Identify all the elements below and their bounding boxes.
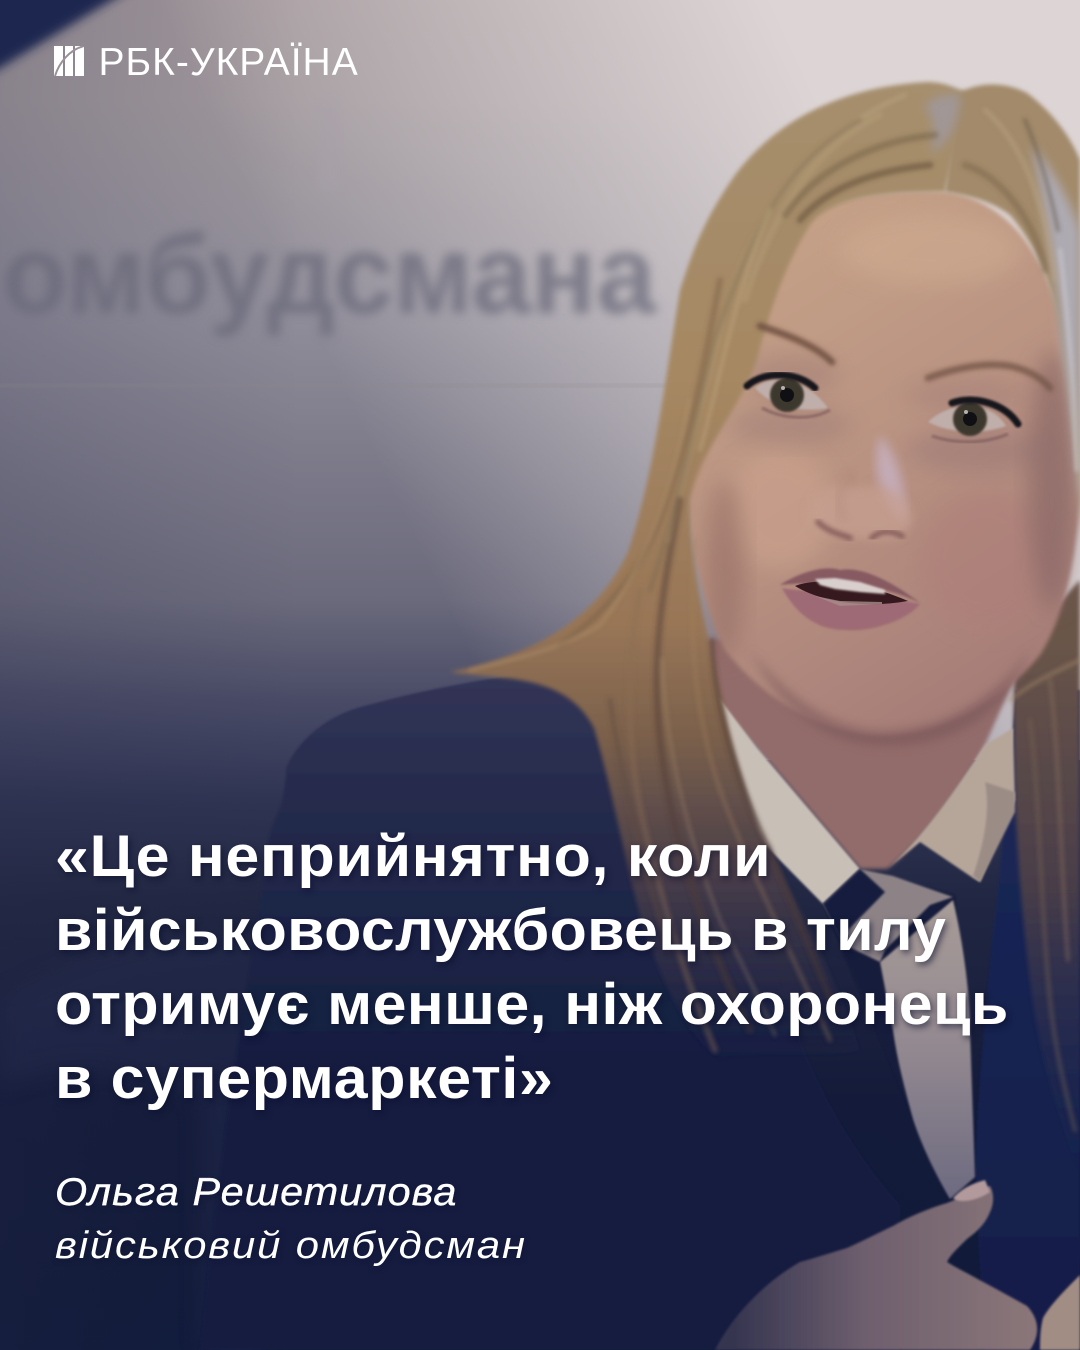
dark lapel behind collar: [823, 869, 975, 1199]
face: [687, 192, 1080, 735]
person: woman in navy jacket: [200, 82, 1080, 1350]
logo: РБК-Україна: [54, 41, 359, 84]
hair silver highlight right: [1032, 145, 1080, 520]
quote line 4: в супермаркеті»: [55, 1046, 554, 1111]
mouth: [780, 568, 920, 630]
collar band: [823, 869, 953, 962]
hair silver parting: [925, 94, 960, 155]
hair front left: [450, 82, 965, 1060]
eye left: [747, 375, 830, 417]
eye right: [928, 400, 1018, 442]
quote line 1: «Це неприйнятно, коли: [55, 824, 771, 889]
nose: [808, 435, 912, 540]
hair strands: [470, 95, 1080, 1130]
logo wordmark: РБК-УКРАЇНА: [98, 41, 359, 84]
jacket left shoulder and body: [200, 672, 900, 1350]
shirt placket: [880, 900, 975, 1199]
attribution: [55, 1171, 527, 1267]
hair right behind collar: [1014, 580, 1080, 1180]
quote line 3: отримує менше, ніж охоронець: [55, 972, 1009, 1037]
hand: thumb and palm: [715, 1180, 1080, 1350]
jacket right side: [975, 690, 1080, 1350]
corner: dark navy triangle: [0, 0, 145, 80]
neck: [700, 620, 1040, 869]
left collar: [713, 690, 860, 904]
background: wall seams: [0, 100, 670, 1350]
cheek and face shading: [705, 215, 1076, 746]
speaker role: військовий омбудсман: [55, 1225, 527, 1267]
quote headline: [55, 824, 1009, 1111]
hair front right: [945, 85, 1080, 540]
speaker name: Ольга Решетилова: [55, 1171, 457, 1214]
background: blurred wall lettering: омбудсмана: [2, 212, 657, 337]
eyebrows: [760, 326, 1050, 388]
right collar: [887, 728, 1015, 882]
quote line 2: військовослужбовець в тилу: [55, 898, 946, 963]
icon: RBC emblem: [54, 46, 84, 76]
